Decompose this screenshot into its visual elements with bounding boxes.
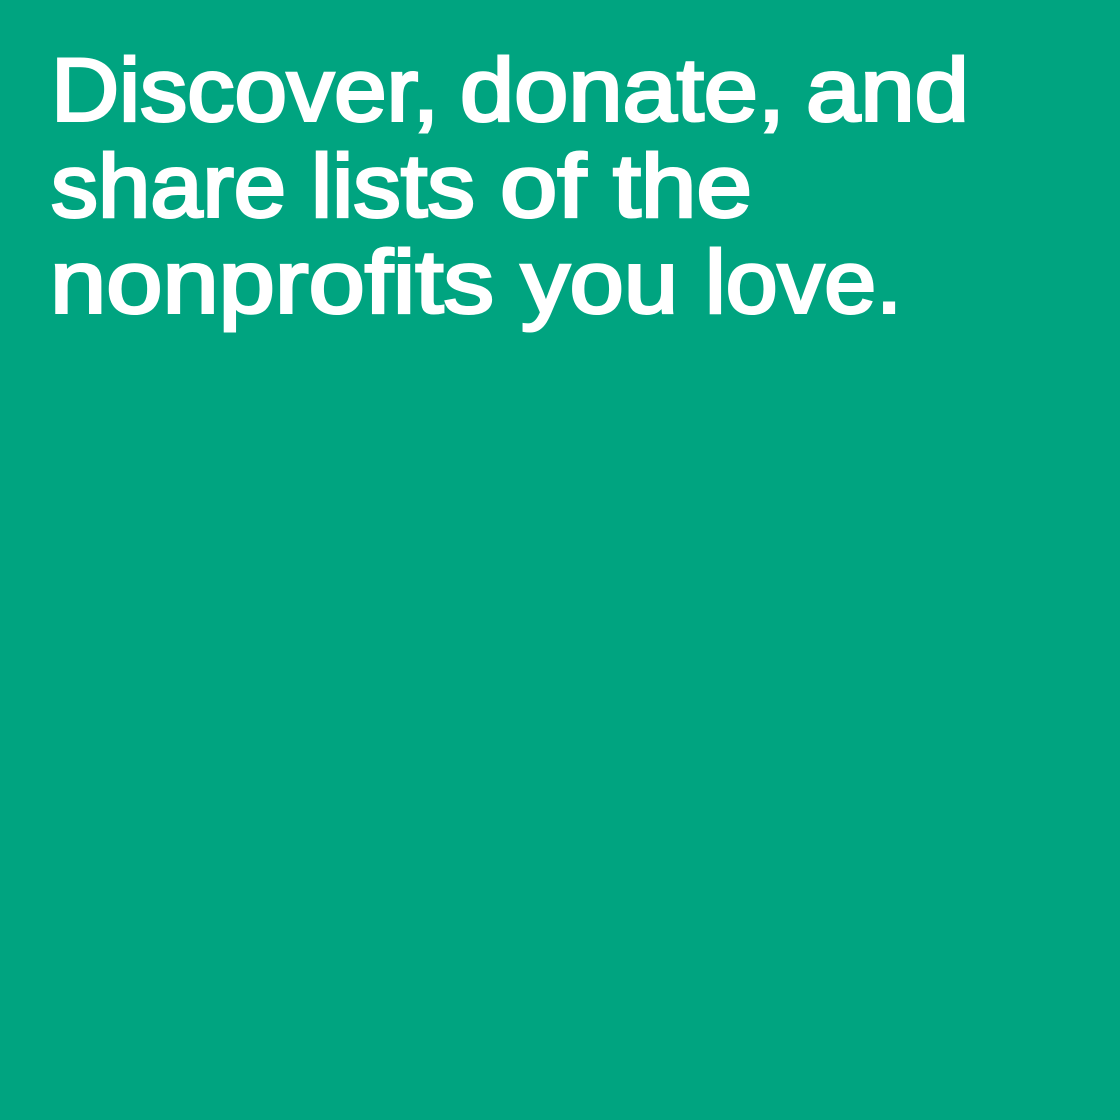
title: and (806, 40, 969, 140)
title: donate, (460, 40, 785, 140)
title: the (613, 136, 752, 236)
title: lists (311, 136, 475, 236)
title: of (500, 136, 586, 236)
title: love. (705, 232, 902, 332)
title: you (521, 232, 678, 332)
title (50, 40, 969, 332)
title: Discover, (51, 40, 439, 140)
title: nonprofits (50, 232, 494, 332)
title: share (51, 136, 286, 236)
